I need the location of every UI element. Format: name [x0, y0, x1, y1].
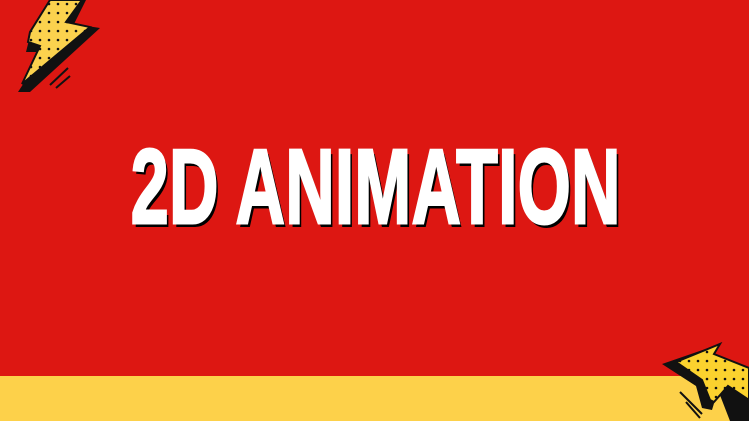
title: 2D ANIMATION: [131, 128, 621, 246]
icon: arrow: [662, 342, 749, 421]
yellow bottom band: [0, 376, 749, 421]
icon: lightning bolt: [18, 0, 100, 92]
